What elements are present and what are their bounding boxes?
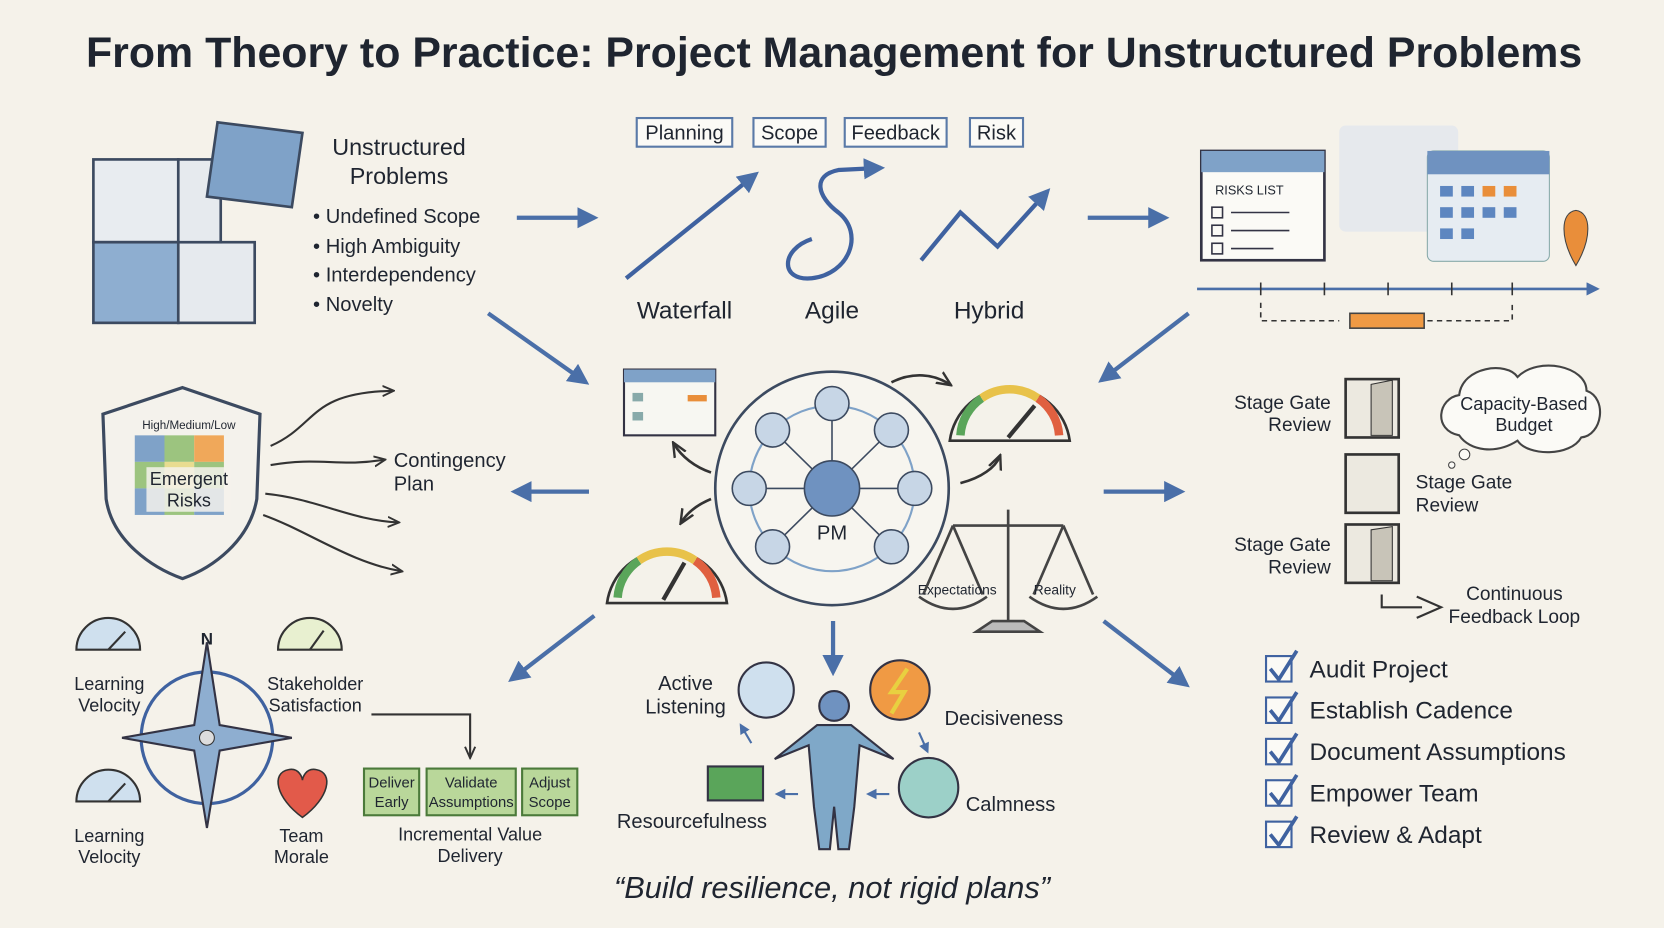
compass and metrics: N [201,629,213,648]
center hub PM: PM [817,522,847,544]
text: unstructured problems: • High Ambiguity [313,236,461,258]
labels methodologies: Hybrid [954,298,1024,325]
compass and metrics: Stakeholder [267,674,363,694]
tags: Risk [977,122,1017,144]
checklist: next steps: Empower Team [1310,780,1479,807]
contingency arrows [263,391,401,571]
arrows [488,218,1189,685]
stage gates: Review [1416,496,1478,517]
checklist: next steps: Document Assumptions [1310,739,1566,766]
incremental value delivery [364,714,577,866]
text: contingency plan: Contingency [394,450,507,472]
incremental value delivery: Delivery [438,846,503,866]
cloud: capacity-based budget [1441,366,1600,468]
incremental value delivery: Adjust [529,776,571,792]
incremental value delivery: Assumptions [429,795,514,811]
icon: small dashboard [624,370,715,435]
cloud: capacity-based budget: Capacity-Based [1460,394,1588,414]
tags: Scope [761,122,818,144]
compass and metrics: Velocity [78,847,140,867]
title: From Theory to Practice: Project Management for Unstructured Problems [86,29,1582,76]
person with skills [617,660,1063,849]
compass and metrics: Learning [74,674,144,694]
labels methodologies [637,298,1024,325]
text: unstructured problems: • Undefined Scope [313,206,480,228]
stage gates: Stage Gate [1234,535,1331,556]
shield: emergent risks: High/Medium/Low [142,419,236,432]
shield: emergent risks: Risks [167,490,211,510]
timeline [1197,283,1597,328]
gauges [607,375,1070,603]
checklist: next steps: Review & Adapt [1310,822,1482,849]
compass and metrics: Satisfaction [269,695,362,715]
text: unstructured problems: • Novelty [313,294,394,316]
person with skills: Calmness [966,794,1055,816]
shield: emergent risks: Emergent [150,469,228,489]
labels methodologies: Waterfall [637,298,732,325]
checklist: next steps: Audit Project [1310,656,1448,683]
checklist: next steps: Establish Cadence [1310,698,1513,725]
person with skills: Resourcefulness [617,811,767,833]
stage gates [1234,379,1580,628]
compass and metrics [74,618,363,867]
tags [637,118,1023,147]
compass and metrics: Morale [274,847,329,867]
text: contingency plan: Plan [394,474,434,496]
text: unstructured problems [313,134,480,316]
person with skills: Listening [645,696,726,718]
compass and metrics: Learning [74,826,144,846]
person with skills: Active [658,673,713,695]
text: unstructured problems: Unstructured [332,134,466,160]
icon: checklist and calendars [1201,125,1588,266]
incremental value delivery: Validate [445,776,497,792]
stage gates: Feedback Loop [1449,607,1580,628]
tags: Planning [645,122,724,144]
person with skills: Decisiveness [944,708,1063,730]
icon: scale expectations vs reality [919,510,1097,632]
methodologies [626,168,1047,279]
stage gates: Stage Gate [1234,393,1331,414]
center hub PM [715,372,949,605]
icon: puzzle [93,122,302,323]
icon: checklist and calendars: RISKS LIST [1215,182,1284,197]
stage gates: Stage Gate [1416,472,1512,493]
cloud: capacity-based budget: Budget [1495,415,1552,435]
compass and metrics: Team [279,826,323,846]
text: contingency plan [394,450,507,496]
quote: “Build resilience, not rigid plans” [614,870,1052,905]
incremental value delivery: Deliver [368,776,415,792]
stage gates: Continuous [1466,584,1563,605]
checklist: next steps [1266,651,1566,849]
stage gates: Review [1268,557,1331,578]
tags: Feedback [851,122,941,144]
incremental value delivery: Scope [529,795,571,811]
text: Expectations [918,583,997,598]
text: Reality [1034,583,1076,598]
incremental value delivery: Early [375,795,409,811]
text: unstructured problems: Problems [350,163,448,189]
compass and metrics: Velocity [78,695,140,715]
labels methodologies: Agile [805,298,859,325]
shield: emergent risks [103,388,260,579]
incremental value delivery: Incremental Value [398,825,542,845]
stage gates: Review [1268,415,1331,436]
text: unstructured problems: • Interdependency [313,264,477,286]
